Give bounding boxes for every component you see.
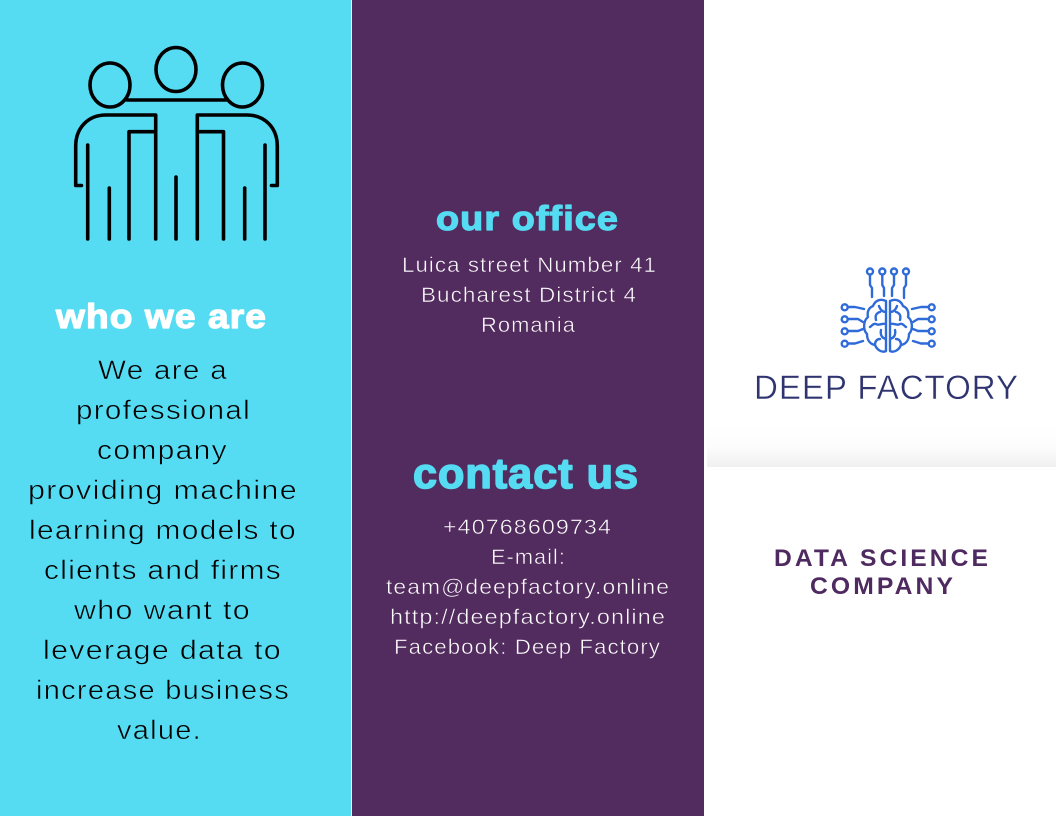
heading: who we are: who we are [55,298,267,336]
tagline: COMPANY [810,573,956,600]
text block: contact details: +40768609734 [443,516,612,539]
text block: office address: Bucharest District 4 [421,284,637,307]
text block: who we are description: leverage data to [43,635,282,665]
text block: who we are description: clients and firms [44,555,282,585]
heading: our office: our office [436,200,619,238]
tagline [774,545,991,600]
text block: who we are description [28,355,298,745]
text block: who we are description: who want to [73,595,251,625]
panel: logo and tagline [707,268,1056,600]
text block: who we are description: providing machine [28,475,298,505]
text block: office address: Luica street Number 41 [402,254,657,277]
text block: contact details [386,516,670,659]
panel: who we are [0,0,351,816]
logo background fade [707,424,1056,467]
text block: who we are description: learning models to [29,515,297,545]
text block: office address [402,254,657,337]
icon: three people [76,48,277,239]
text block: who we are description: company [97,435,228,465]
text block: contact details: Facebook: Deep Factory [394,636,661,659]
text block: contact details: E-mail: [491,546,566,569]
tagline: DATA SCIENCE [774,545,991,572]
icon: circuit brain [842,268,935,352]
text block: who we are description: increase business [36,675,290,705]
text block: contact details: http://deepfactory.online [390,606,666,629]
logo wordmark: DEEP FACTORY [754,369,1019,407]
text block: who we are description: value. [117,715,202,745]
panel: office and contact [352,0,704,816]
text block: contact details: team@deepfactory.online [386,576,670,599]
text block: who we are description: We are a [98,355,228,385]
text block: office address: Romania [481,314,576,337]
text block: who we are description: professional [76,395,251,425]
heading: contact us: contact us [413,450,639,498]
